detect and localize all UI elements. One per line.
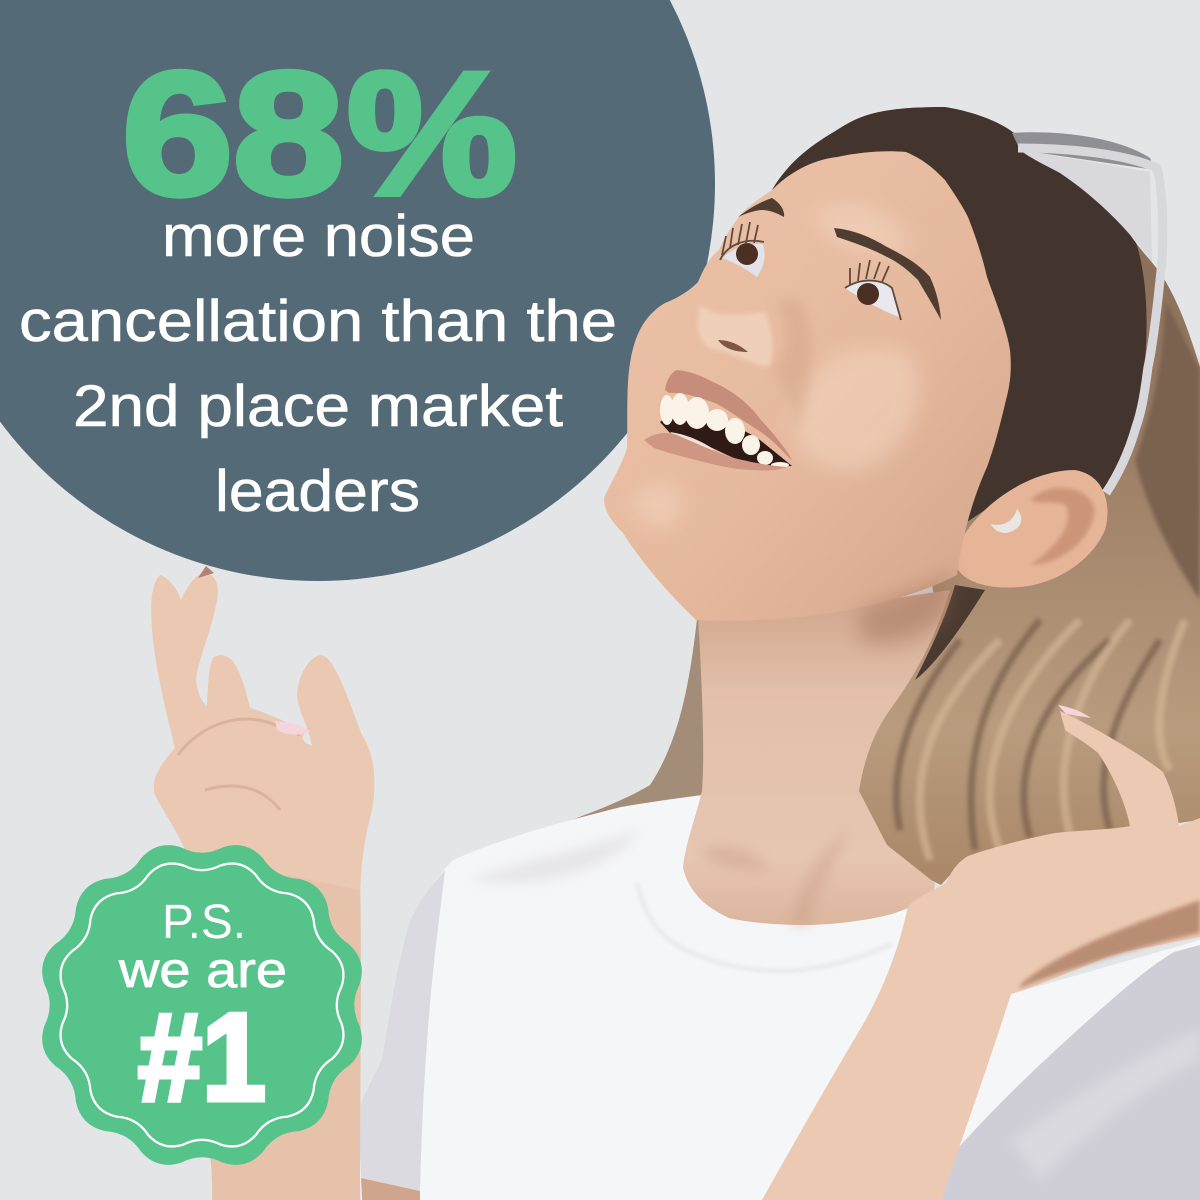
hair dark top — [772, 107, 1147, 530]
line 1: more noise — [162, 204, 475, 269]
eyebrow right — [834, 228, 941, 320]
hair lower dark streaks — [896, 620, 1160, 850]
t-shirt right sleeve — [941, 945, 1200, 1200]
left hand finger crease — [178, 719, 300, 810]
glasses top bar — [1012, 132, 1155, 170]
glasses lens — [1020, 150, 1152, 262]
earbud — [991, 509, 1021, 533]
line 2: cancellation than the — [19, 289, 617, 354]
lashes left — [720, 222, 764, 260]
nostril shadow — [718, 340, 748, 352]
inner ear shading — [1030, 488, 1095, 565]
person photo illustration — [151, 107, 1200, 1200]
upper lip — [665, 370, 792, 460]
percent sign: % — [347, 37, 517, 232]
nose — [698, 305, 772, 366]
badge inner line — [61, 864, 343, 1146]
hair base — [772, 107, 1200, 885]
lower lip — [644, 433, 788, 471]
lashes right — [845, 260, 901, 320]
left arm — [186, 850, 361, 1200]
badge: P.S. we are #1 — [42, 845, 362, 1165]
mouth interior — [660, 415, 792, 466]
upper teeth — [660, 393, 789, 468]
t-shirt — [358, 795, 1200, 1200]
thin hair strands behind neck — [450, 619, 720, 865]
fingernail top — [198, 566, 214, 578]
right fingernail — [1058, 705, 1091, 718]
description text — [19, 204, 617, 524]
badge text we are: we are — [118, 942, 287, 998]
left hand — [151, 573, 374, 890]
68: 68 — [122, 37, 344, 232]
iris left — [736, 243, 758, 265]
line 3: 2nd place market — [73, 374, 563, 439]
badge text #1: #1 — [138, 989, 266, 1127]
t-shirt collar seam — [637, 883, 892, 971]
glasses frame — [1018, 148, 1163, 493]
speech circle panel — [0, 0, 715, 581]
iris right — [857, 283, 879, 305]
eyebrow left — [738, 198, 784, 217]
line 4: leaders — [215, 459, 420, 524]
eye right — [845, 282, 899, 317]
lower teeth — [670, 432, 715, 450]
face — [604, 151, 1011, 621]
ear — [955, 470, 1107, 588]
badge shape — [42, 845, 362, 1165]
shoulder shadow — [470, 830, 640, 883]
fingernail — [275, 721, 310, 735]
neck — [683, 590, 950, 925]
hair lower highlights — [920, 620, 1185, 860]
hair dark below ear — [915, 585, 985, 680]
jaw shadow — [860, 570, 955, 644]
right sleeve highlight — [1011, 1030, 1200, 1180]
cheek and forehead highlights — [630, 204, 919, 530]
nose bridge shadow — [775, 300, 811, 450]
right arm and hand — [762, 711, 1200, 1200]
hair right brown streak — [1135, 300, 1200, 600]
headline stat — [122, 37, 517, 232]
eye left — [722, 244, 765, 277]
neck clavicle shading — [700, 830, 850, 925]
t-shirt left sleeve — [358, 870, 445, 1191]
sleeve cuff shadow — [361, 1178, 420, 1200]
badge text P.S.: P.S. — [162, 896, 246, 949]
right palm shadow — [1020, 900, 1200, 988]
